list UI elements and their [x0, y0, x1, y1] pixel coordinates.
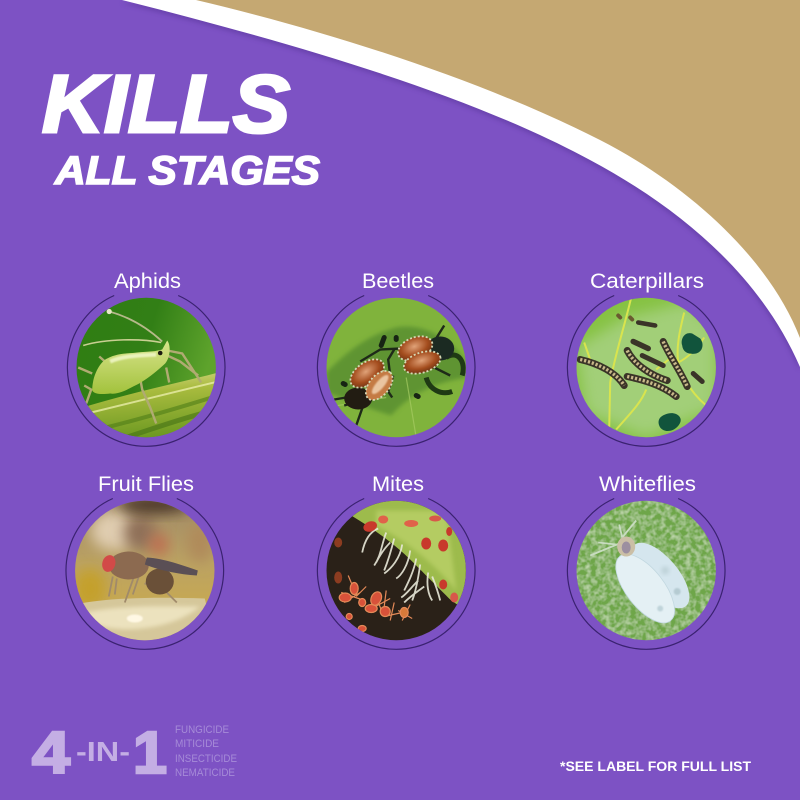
ring	[67, 296, 225, 446]
big numerals and IN: 4	[32, 720, 70, 786]
product types list: NEMATICIDE	[175, 767, 235, 779]
label: Mites: Mites	[372, 473, 424, 496]
label: Fruit Flies: Fruit Flies	[98, 473, 194, 496]
photo: fruit fly	[74, 496, 215, 640]
product types list: MITICIDE	[175, 738, 219, 750]
label: Caterpillars: Caterpillars	[590, 270, 704, 293]
big numerals and IN: -IN-	[76, 736, 130, 767]
spider mites cluster	[339, 576, 412, 632]
fly	[100, 552, 198, 602]
panel: mites	[317, 473, 475, 649]
ring	[66, 498, 224, 649]
white swoosh band	[122, 0, 800, 367]
caterpillar group	[580, 316, 702, 396]
tan corner	[196, 0, 800, 338]
label: Whiteflies: Whiteflies	[599, 473, 696, 496]
ring	[567, 296, 725, 446]
label: Aphids: Aphids	[114, 270, 181, 293]
panel: aphids	[67, 270, 225, 446]
label: Beetles: Beetles	[362, 270, 434, 293]
title	[42, 59, 320, 193]
product types list: INSECTICIDE	[175, 753, 237, 765]
title line: KILLS: KILLS	[42, 59, 290, 150]
ring	[567, 498, 725, 649]
panel: whiteflies	[567, 473, 725, 649]
photo: whitefly	[576, 500, 716, 640]
photo: caterpillars	[576, 298, 716, 438]
footnote: *SEE LABEL FOR FULL LIST	[560, 758, 751, 774]
product types list	[175, 724, 237, 779]
logo: 4-in-1	[32, 720, 237, 786]
photo: aphid	[74, 298, 218, 440]
beetle left	[334, 350, 398, 426]
product types list: FUNGICIDE	[175, 724, 229, 736]
ring	[317, 296, 475, 446]
ring	[317, 498, 475, 649]
swoosh shadow	[121, 3, 799, 370]
big numerals and IN: 1	[133, 720, 167, 786]
title line: ALL STAGES: ALL STAGES	[54, 149, 320, 193]
panel: fruit flies	[66, 473, 224, 649]
beetle right	[360, 326, 454, 398]
photo: beetles	[326, 298, 466, 438]
photo: mites	[326, 500, 466, 640]
panel: caterpillars	[567, 270, 725, 446]
big numerals and IN	[32, 720, 167, 786]
panel: beetles	[317, 270, 475, 446]
